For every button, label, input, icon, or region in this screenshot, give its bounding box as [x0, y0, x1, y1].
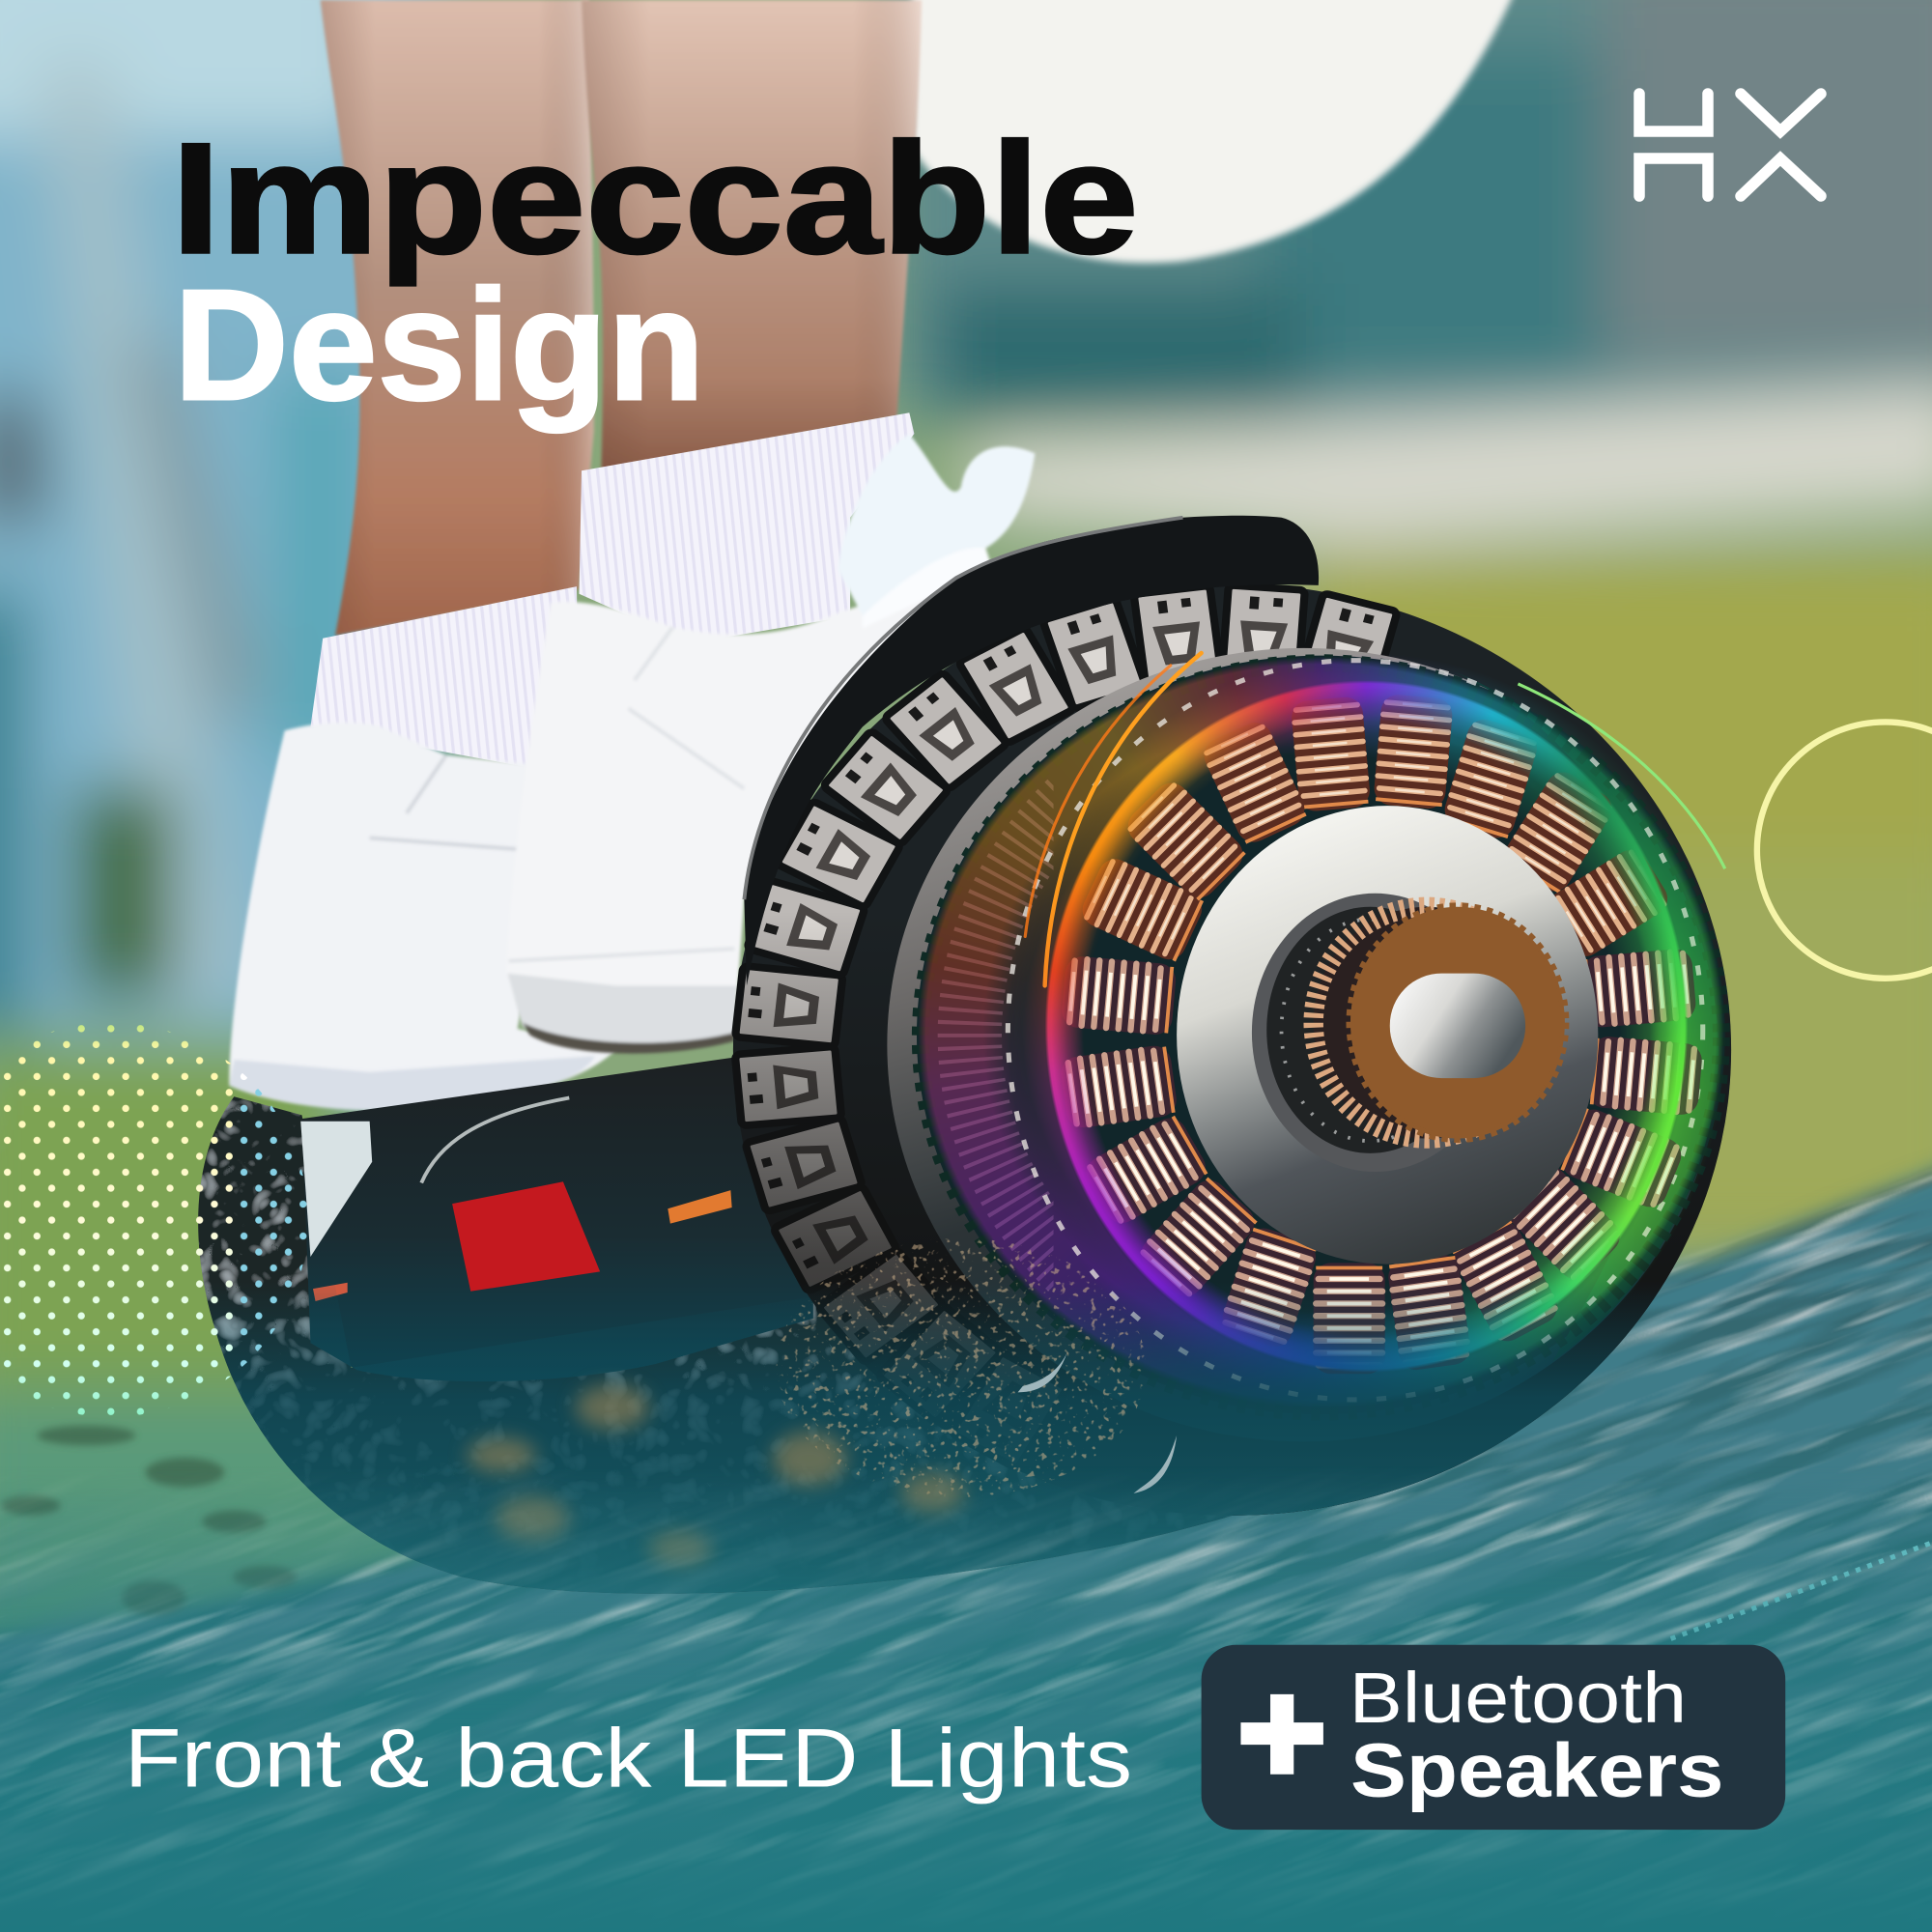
title	[171, 109, 1139, 433]
halftone dot circle	[4, 1025, 307, 1416]
bottom teal gradient	[0, 1479, 1932, 1932]
plus icon	[1240, 1694, 1323, 1775]
black fender	[744, 516, 1319, 985]
curved panel highlight	[421, 1097, 569, 1182]
badge text: Speakers	[1350, 1727, 1723, 1813]
wide colour glow on sidewall	[918, 657, 1723, 1408]
orange light flares	[1025, 653, 1202, 985]
white hub ring	[1177, 806, 1598, 1264]
coil stator ring	[1059, 694, 1703, 1374]
front leg	[582, 0, 922, 470]
yellow ring accent	[1757, 722, 1932, 979]
ground overlay on lower tyre	[0, 1489, 1932, 1836]
bluetooth speakers badge	[1202, 1645, 1785, 1830]
left groove lines	[937, 780, 1053, 1291]
rear sock	[310, 586, 579, 770]
badge text	[1350, 1658, 1723, 1813]
red power block	[452, 1181, 600, 1292]
orange marker	[668, 1190, 732, 1224]
copper gear	[1314, 907, 1565, 1139]
metal axle knob	[1390, 974, 1525, 1078]
dark green right rim tint	[1454, 671, 1719, 1361]
rainbow LED ring	[1045, 680, 1688, 1373]
serrated sidewall edge	[921, 663, 1721, 1412]
front shoe	[506, 434, 1035, 1054]
hoverboard base	[300, 1057, 813, 1381]
tyre fade into ground	[207, 1287, 1654, 1594]
tyre shoulder	[887, 648, 1720, 1441]
dotted teal line	[1671, 1543, 1932, 1638]
dirt spray	[467, 1238, 1177, 1566]
rear leg	[321, 0, 594, 636]
dashed inner rim ring	[1008, 661, 1703, 1400]
small orange marker	[313, 1283, 348, 1301]
brand logo HX	[1639, 94, 1821, 196]
title: Design	[174, 256, 705, 433]
ground motion streaks	[0, 1157, 1932, 1853]
rear shoe	[229, 723, 616, 1111]
wheel sidewall disc	[917, 656, 1725, 1414]
dark hub opening	[1252, 894, 1498, 1172]
white side panel	[300, 1122, 372, 1257]
green light trail arc	[1518, 684, 1725, 868]
badge text: Bluetooth	[1350, 1658, 1687, 1738]
front sock	[579, 412, 914, 643]
rainbow glow blur	[1014, 661, 1719, 1381]
title: Impeccable	[171, 109, 1139, 286]
grass dirt spots	[1, 1426, 297, 1615]
main tyre with tread blocks	[727, 579, 1737, 1528]
tagline: Front & back LED Lights	[125, 1711, 1132, 1804]
rear tyre and dirt spray	[198, 1096, 1233, 1594]
